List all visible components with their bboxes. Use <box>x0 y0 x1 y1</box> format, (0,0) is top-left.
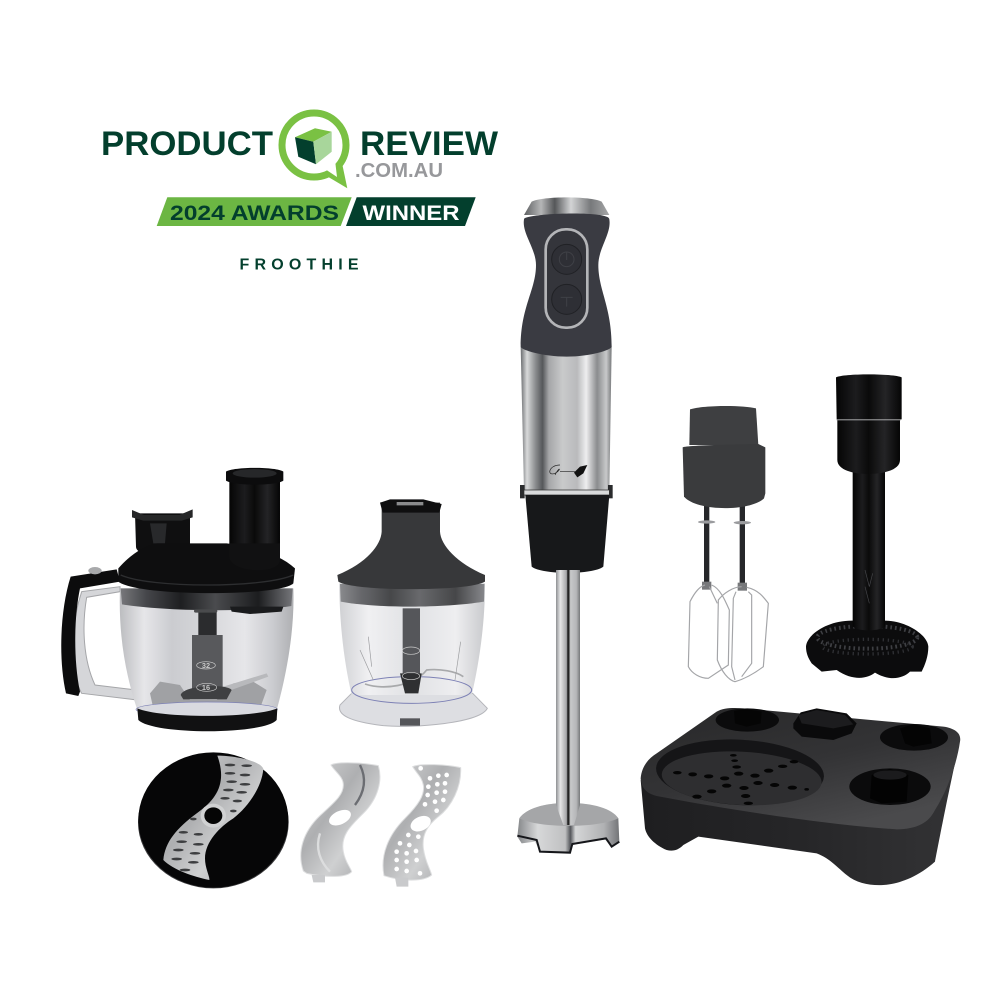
blender grip <box>521 214 612 357</box>
storage base side wall <box>641 740 960 885</box>
masher stem <box>853 470 885 630</box>
processor tall feed tube <box>226 468 283 570</box>
icon: speech bubble with cube <box>282 113 347 188</box>
chopper lid <box>337 499 485 589</box>
slicing disc with blade <box>138 752 289 888</box>
masher coupling <box>836 374 902 474</box>
banner: winner: WINNER <box>362 202 460 225</box>
stick blender motor body <box>520 197 613 573</box>
processor central spindle: 32 <box>202 661 210 670</box>
banner: 2024 awards: 2024 AWARDS <box>170 202 339 225</box>
processor lid <box>118 543 295 593</box>
wordmark: PRODUCT: PRODUCT <box>101 125 273 163</box>
stick blender shaft <box>517 570 619 853</box>
processor central spindle <box>181 609 232 699</box>
accessory storage base <box>641 708 960 885</box>
processor handle <box>61 567 137 700</box>
blender steel body <box>521 347 612 492</box>
shaft tube <box>556 570 580 825</box>
disc hub <box>201 804 226 828</box>
storage well with holes <box>654 735 826 809</box>
storage socket: octagonal center <box>793 708 857 740</box>
storage socket: front right <box>849 768 931 805</box>
chopper bowl <box>337 499 487 726</box>
logo: ProductReview 2024 awards winner <box>101 113 499 273</box>
processor small feed chute <box>132 509 193 557</box>
banner: winner <box>346 197 476 226</box>
masher foot <box>806 621 928 678</box>
blender collar clips <box>520 485 525 498</box>
food processor bowl <box>61 468 295 731</box>
processor central spindle: 16 <box>202 683 210 692</box>
blender chrome ring <box>524 490 609 495</box>
whisk rods <box>698 505 751 591</box>
blender control panel <box>546 229 587 328</box>
mixer gearbox housing <box>683 406 765 508</box>
wordmark: REVIEW: REVIEW <box>360 125 499 163</box>
processor base <box>137 708 277 731</box>
processor bowl body <box>120 588 294 717</box>
chopper base ring <box>340 693 487 726</box>
slicing blade insert <box>301 763 380 882</box>
storage base top surface <box>641 708 960 829</box>
blender logo signature <box>550 465 587 477</box>
grating blade insert <box>383 765 461 887</box>
hand mixer attachment <box>683 406 768 682</box>
banner: 2024 awards <box>157 197 352 226</box>
storage socket: small rear left <box>716 708 779 732</box>
blender metal cap <box>524 197 609 215</box>
storage socket: rear right <box>880 724 948 751</box>
chopper bowl body <box>339 583 485 703</box>
blender black collar <box>525 495 609 573</box>
whisk loops <box>688 585 768 682</box>
masher attachment <box>806 374 928 678</box>
shaft blade foot <box>517 803 619 853</box>
wordmark: .COM.AU: .COM.AU <box>355 160 443 182</box>
brand name: Froothie: FROOTHIE <box>240 256 359 273</box>
